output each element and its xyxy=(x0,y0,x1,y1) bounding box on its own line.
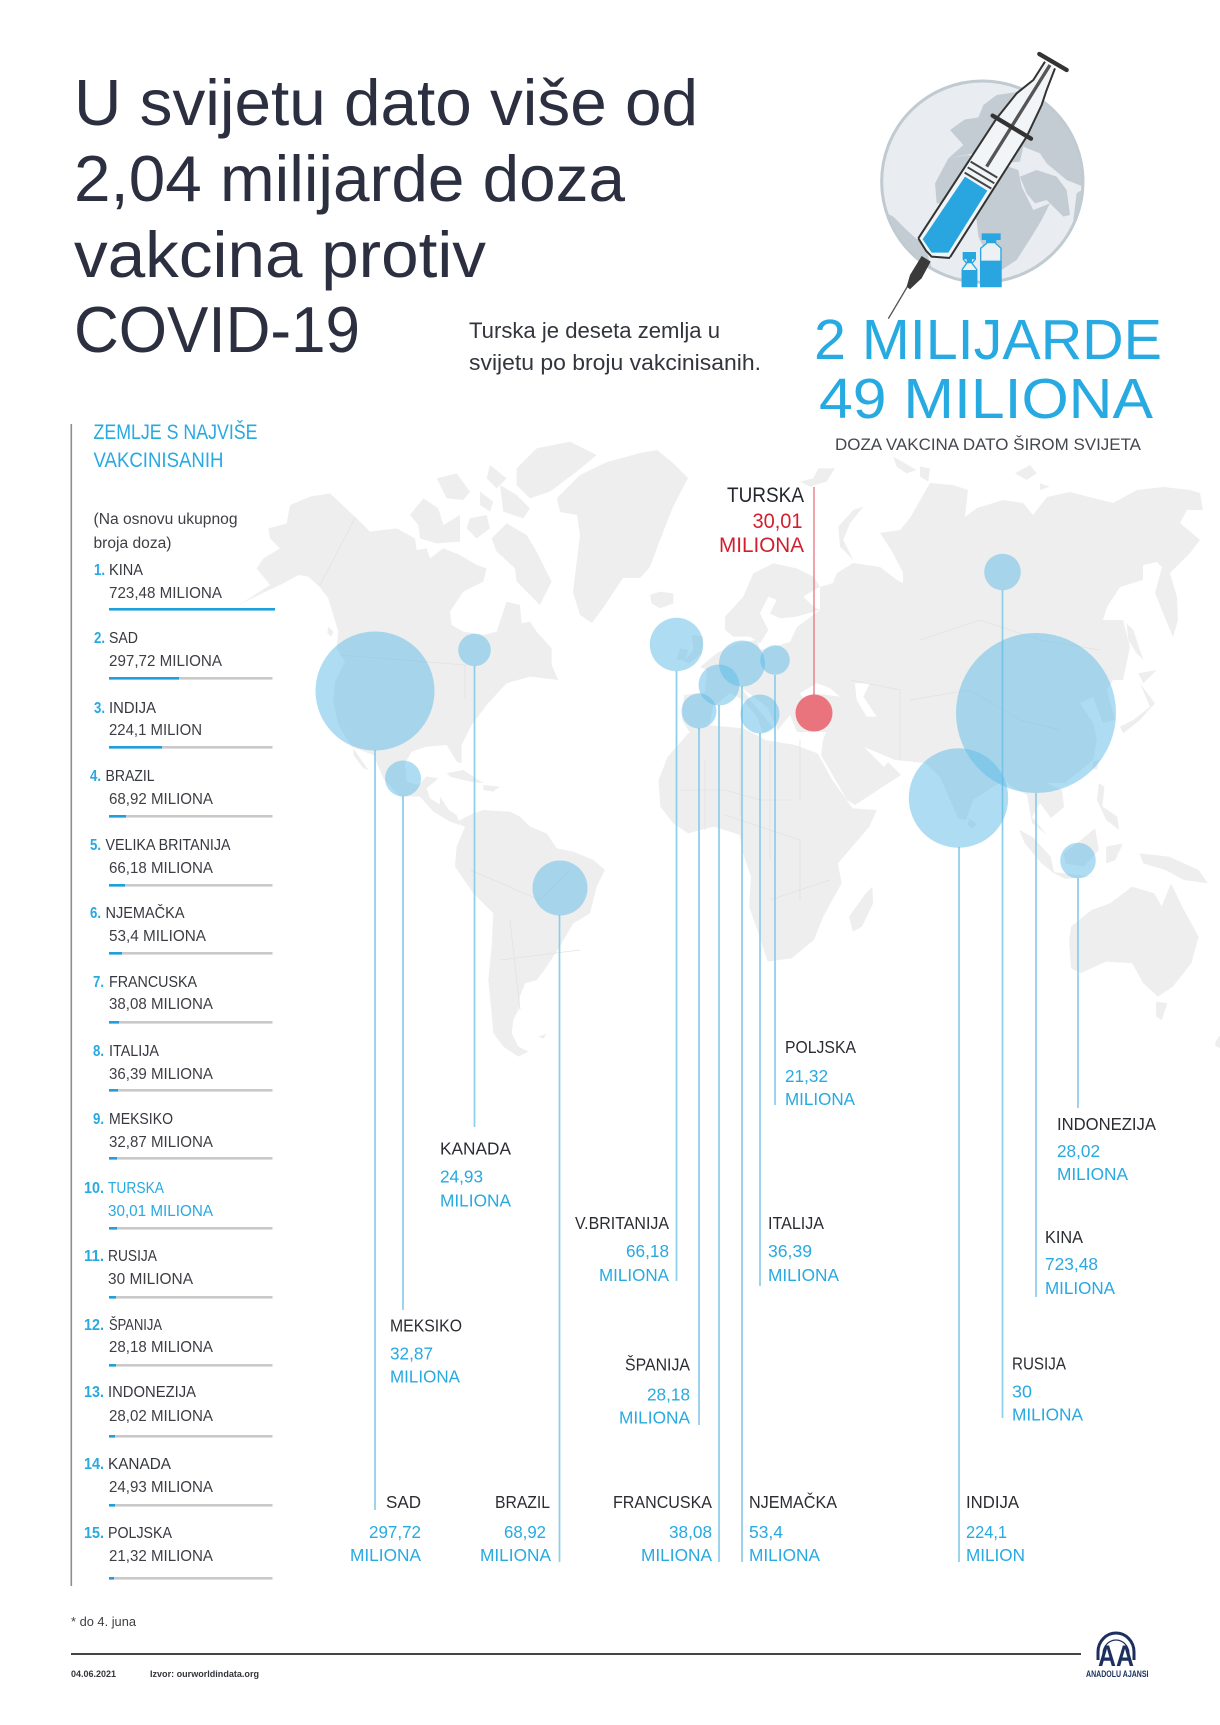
list note: (Na osnovu ukupnog xyxy=(94,511,238,528)
row 14: KANADA xyxy=(108,1456,171,1473)
label: Indija: 224,1 xyxy=(966,1522,1007,1542)
label: V.Britanija xyxy=(575,1213,669,1285)
bubble: SAD xyxy=(316,632,434,750)
Turkey marker xyxy=(796,487,832,732)
row 13: 13. xyxy=(84,1384,104,1401)
label: Francuska: MILIONA xyxy=(641,1545,712,1565)
row 8 xyxy=(93,1043,272,1092)
label: V.Britanija: V.BRITANIJA xyxy=(575,1213,669,1233)
label: Brazil xyxy=(480,1492,551,1565)
label: Kanada: KANADA xyxy=(440,1138,511,1158)
label: Španija xyxy=(619,1354,690,1428)
row 15: 21,32 MILIONA xyxy=(109,1548,213,1565)
row 13: INDONEZIJA xyxy=(108,1384,196,1401)
row 1: 1. xyxy=(94,562,105,579)
label: SAD: 297,72 xyxy=(369,1522,421,1542)
row 7: 38,08 MILIONA xyxy=(109,996,213,1013)
label: Brazil: BRAZIL xyxy=(495,1492,550,1512)
list heading: VAKCINISANIH xyxy=(94,449,224,472)
title: COVID-19 xyxy=(74,293,360,366)
label: Poljska: MILIONA xyxy=(785,1089,855,1109)
footer rule and source: 04.06.2021 xyxy=(71,1669,117,1680)
label: V.Britanija: 66,18 xyxy=(626,1241,669,1261)
bubble: Italija xyxy=(740,694,780,734)
bubble: Španija xyxy=(682,694,716,728)
row 4: 4. xyxy=(90,768,101,785)
bubble: Indonezija xyxy=(1060,843,1096,878)
row 5 xyxy=(90,837,272,887)
row 15 xyxy=(84,1525,272,1580)
headline number xyxy=(814,308,1162,431)
row 10: 30,01 MILIONA xyxy=(108,1203,213,1220)
label: Njemačka: MILIONA xyxy=(749,1545,820,1565)
bubble: Francuska xyxy=(698,664,740,706)
label: Brazil: MILIONA xyxy=(480,1545,551,1565)
label: Španija: ŠPANIJA xyxy=(625,1354,690,1374)
row 5: 66,18 MILIONA xyxy=(109,860,213,877)
title: vakcina protiv xyxy=(74,218,487,291)
row 12 xyxy=(84,1315,272,1367)
row 2: SAD xyxy=(109,630,138,647)
row 12: ŠPANIJA xyxy=(109,1315,162,1334)
label: Indija xyxy=(966,1492,1025,1565)
label: Kina xyxy=(1045,1227,1115,1298)
label: Poljska xyxy=(785,1037,856,1109)
row 3: INDIJA xyxy=(109,700,156,717)
label: Indija: MILION xyxy=(966,1545,1025,1565)
label: Rusija xyxy=(1012,1354,1083,1424)
footer rule and source: Izvor: ourworldindata.org xyxy=(150,1669,259,1680)
subtitle text: Turska je deseta zemlja u xyxy=(469,318,720,343)
label: Poljska: POLJSKA xyxy=(785,1037,856,1057)
row 12: 28,18 MILIONA xyxy=(109,1339,213,1356)
label: Francuska: FRANCUSKA xyxy=(613,1492,712,1512)
row 1: KINA xyxy=(109,562,143,579)
row 2 xyxy=(94,630,272,680)
label: Turska xyxy=(719,483,805,557)
row 15: POLJSKA xyxy=(108,1525,172,1542)
row 8: 8. xyxy=(93,1043,104,1060)
row 9 xyxy=(93,1111,272,1160)
row 13: 28,02 MILIONA xyxy=(109,1408,213,1425)
row 1 xyxy=(94,562,275,611)
label: Indonezija: MILIONA xyxy=(1057,1164,1128,1184)
label: Italija: ITALIJA xyxy=(768,1213,824,1233)
label: Kanada: MILIONA xyxy=(440,1190,511,1210)
row 14: 24,93 MILIONA xyxy=(109,1479,213,1496)
label: Rusija: 30 xyxy=(1012,1382,1032,1402)
bubble: Kanada xyxy=(458,634,491,666)
row 11: 11. xyxy=(84,1248,104,1265)
row 10: TURSKA xyxy=(108,1180,164,1197)
row 4 xyxy=(90,768,272,818)
list note xyxy=(94,511,238,552)
title: U svijetu dato više od xyxy=(74,66,698,139)
label: Italija: MILIONA xyxy=(768,1265,839,1285)
list note: broja doza) xyxy=(94,535,172,552)
bubble: Rusija xyxy=(984,554,1021,590)
list heading xyxy=(94,421,258,472)
label: Njemačka: NJEMAČKA xyxy=(749,1491,837,1512)
label: Meksiko: 32,87 xyxy=(390,1344,433,1364)
row 10 xyxy=(84,1180,272,1230)
row 8: 36,39 MILIONA xyxy=(109,1066,213,1083)
row 5: VELIKA BRITANIJA xyxy=(106,837,231,854)
headline number: 49 MILIONA xyxy=(819,367,1153,431)
headline number: 2 MILIJARDE xyxy=(814,308,1162,372)
label: SAD xyxy=(350,1492,421,1565)
row 4: 68,92 MILIONA xyxy=(109,791,213,808)
label: Meksiko: MEKSIKO xyxy=(390,1316,462,1336)
label: Španija: MILIONA xyxy=(619,1408,690,1428)
panel: ranking list xyxy=(70,421,275,1586)
label: Poljska: 21,32 xyxy=(785,1066,828,1086)
row 11 xyxy=(84,1248,272,1299)
row 3: 224,1 MILION xyxy=(109,722,202,739)
label: Kina: 723,48 xyxy=(1045,1254,1098,1274)
label: Kanada xyxy=(440,1138,511,1210)
row 7: 7. xyxy=(93,974,104,991)
row 9: MEKSIKO xyxy=(109,1111,173,1128)
row 11: 30 MILIONA xyxy=(108,1271,193,1288)
row 15: 15. xyxy=(84,1525,104,1542)
label: Njemačka xyxy=(749,1491,837,1565)
label: Francuska xyxy=(613,1492,712,1565)
label: Meksiko xyxy=(390,1316,462,1386)
logo: Anadolu Ajansi: ANADOLU AJANSI xyxy=(1086,1669,1148,1679)
label: Turska: 30,01 xyxy=(752,509,802,533)
row 5: 5. xyxy=(90,837,101,854)
logo: Anadolu Ajansi: AA xyxy=(1098,1640,1134,1673)
list heading: ZEMLJE S NAJVIŠE xyxy=(94,421,258,444)
title: 2,04 milijarde doza xyxy=(74,142,626,215)
row 6: 6. xyxy=(90,905,101,922)
label: Rusija: RUSIJA xyxy=(1012,1354,1066,1374)
logo: Anadolu Ajansi xyxy=(1086,1633,1148,1679)
label: Španija: 28,18 xyxy=(647,1384,690,1404)
icon: globe with syringe and vials xyxy=(880,54,1087,319)
footer rule and source xyxy=(71,1653,1081,1680)
label: SAD: MILIONA xyxy=(350,1545,421,1565)
row 14 xyxy=(84,1456,272,1507)
row 4: BRAZIL xyxy=(106,768,155,785)
label: Italija xyxy=(768,1213,839,1285)
label: Indija: INDIJA xyxy=(966,1492,1019,1512)
label: Kina: KINA xyxy=(1045,1227,1083,1247)
subtitle text xyxy=(469,318,761,375)
row 6: NJEMAČKA xyxy=(106,903,185,922)
label: V.Britanija: MILIONA xyxy=(599,1265,669,1285)
row 12: 12. xyxy=(84,1317,104,1334)
row 7: FRANCUSKA xyxy=(109,974,197,991)
label: Turska: MILIONA xyxy=(719,533,805,557)
row 8: ITALIJA xyxy=(109,1043,159,1060)
label: Indonezija xyxy=(1057,1114,1156,1184)
label: Turska: TURSKA xyxy=(727,483,805,507)
subtitle text: svijetu po broju vakcinisanih. xyxy=(469,350,761,375)
label: Italija: 36,39 xyxy=(768,1241,812,1261)
row 3: 3. xyxy=(94,700,105,717)
row 9: 32,87 MILIONA xyxy=(109,1134,213,1151)
world map xyxy=(237,442,1220,1057)
row 7 xyxy=(93,974,272,1024)
label: Indonezija: INDONEZIJA xyxy=(1057,1114,1156,1134)
row 2: 2. xyxy=(94,630,105,647)
bubble: Brazil xyxy=(532,860,588,916)
title xyxy=(74,66,698,366)
label: Indonezija: 28,02 xyxy=(1057,1141,1100,1161)
row 14: 14. xyxy=(84,1456,104,1473)
bubble: V.Britanija xyxy=(650,618,703,671)
row 10: 10. xyxy=(84,1180,104,1197)
bubble: Njemačka xyxy=(719,640,765,686)
row 13 xyxy=(84,1384,272,1438)
row 3 xyxy=(94,700,272,749)
label: Njemačka: 53,4 xyxy=(749,1522,783,1542)
row 1: 723,48 MILIONA xyxy=(109,585,222,602)
row 9: 9. xyxy=(93,1111,104,1128)
bubble: Poljska xyxy=(760,645,790,675)
label: SAD: SAD xyxy=(386,1492,421,1512)
label: Rusija: MILIONA xyxy=(1012,1404,1083,1424)
footnote: * do 4. juna xyxy=(71,1614,137,1629)
leader lines xyxy=(375,590,1078,1562)
row 2: 297,72 MILIONA xyxy=(109,653,222,670)
label: Kanada: 24,93 xyxy=(440,1166,483,1186)
headline caption: DOZA VAKCINA DATO ŠIROM SVIJETA xyxy=(835,435,1142,454)
bubble: Indija xyxy=(909,748,1008,848)
row 11: RUSIJA xyxy=(108,1248,157,1265)
bubble: Meksiko xyxy=(385,760,421,796)
row 6 xyxy=(90,903,272,955)
row 6: 53,4 MILIONA xyxy=(109,928,206,945)
bubble: Kina xyxy=(956,633,1116,793)
label: Francuska: 38,08 xyxy=(669,1522,712,1542)
label: Meksiko: MILIONA xyxy=(390,1366,460,1386)
label: Kina: MILIONA xyxy=(1045,1278,1115,1298)
label: Brazil: 68,92 xyxy=(504,1522,546,1542)
